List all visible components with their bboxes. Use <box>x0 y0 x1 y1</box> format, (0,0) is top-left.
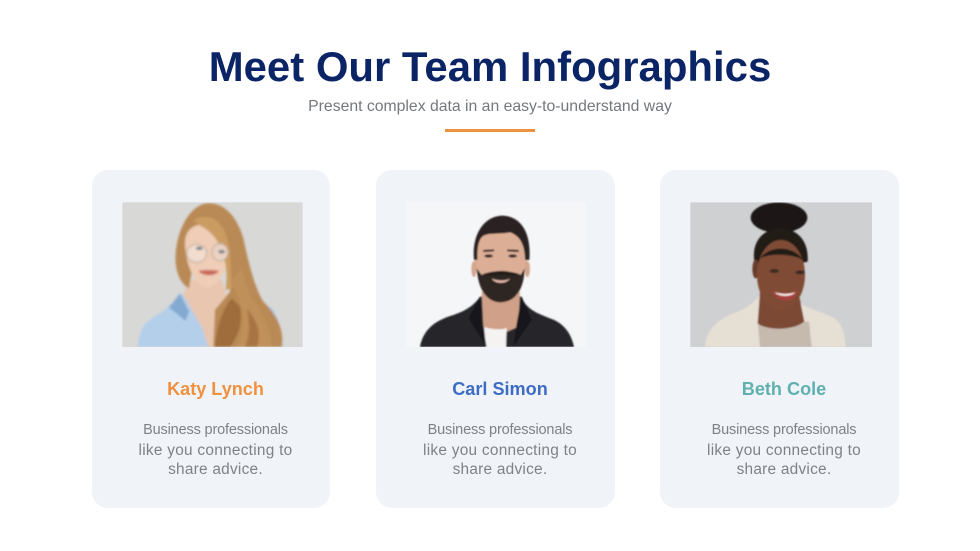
name: Katy Lynch <box>167 379 264 399</box>
panel: Beth Cole <box>660 170 899 508</box>
name: Carl Simon <box>452 379 548 399</box>
description: like you connecting to <box>707 442 861 458</box>
description: Business professionals <box>428 422 572 438</box>
description: like you connecting to <box>139 442 292 458</box>
description: Business professionals <box>143 422 288 438</box>
name: Beth Cole <box>742 379 826 399</box>
orange accent underline <box>445 129 535 132</box>
portrait: Beth Cole <box>690 202 872 347</box>
subtitle: Present complex data in an easy-to-understand way <box>308 98 672 115</box>
description: share advice. <box>453 461 547 478</box>
panel: Katy Lynch <box>92 170 330 508</box>
description: Business professionals <box>712 422 856 438</box>
portrait: Katy Lynch <box>122 202 303 347</box>
description <box>423 422 577 478</box>
title: Meet Our Team Infographics <box>209 43 771 90</box>
description: like you connecting to <box>423 442 577 458</box>
description: share advice. <box>737 461 831 478</box>
description <box>139 422 292 478</box>
description <box>707 422 861 478</box>
description: share advice. <box>168 461 263 478</box>
panel: Carl Simon <box>376 170 615 508</box>
portrait: Carl Simon <box>419 214 575 347</box>
